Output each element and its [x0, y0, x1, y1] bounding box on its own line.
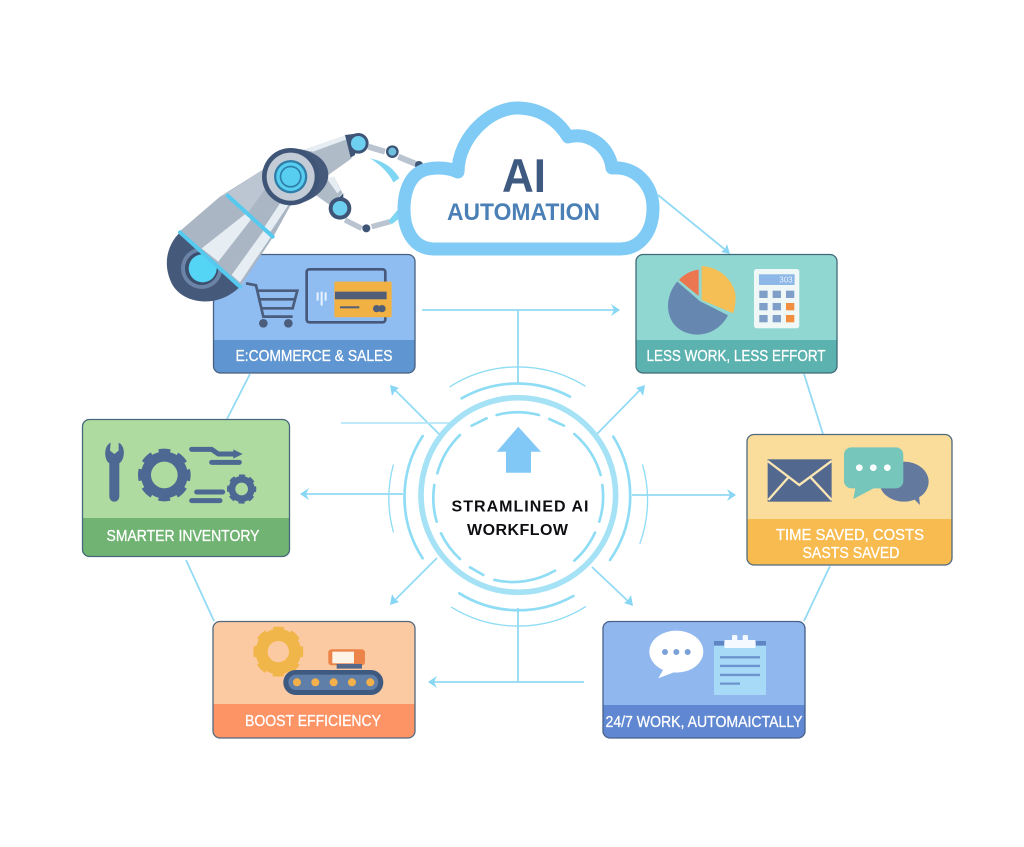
central hub: streamlined AI workflow — [389, 367, 648, 626]
icon: wrench and gears — [105, 443, 255, 502]
robot lower arm and base — [167, 168, 292, 301]
icon: gear and conveyor — [256, 629, 383, 695]
icon: speech bubble — [649, 631, 703, 678]
robot upper arm and fingers — [262, 133, 423, 232]
connector lines and arrows — [186, 195, 830, 688]
icon: chat bubbles — [844, 447, 929, 505]
label: boost efficiency: BOOST EFFICIENCY — [245, 713, 381, 730]
panel: boost efficiency — [213, 622, 415, 738]
cloud subtitle: automation: AUTOMATION — [447, 199, 600, 226]
icon: shopping cart — [246, 283, 297, 328]
icon: robot arm — [167, 133, 423, 301]
panel: 24/7 work — [603, 622, 805, 738]
panel: smarter inventory — [82, 420, 290, 556]
panel: less work — [636, 254, 837, 373]
label: 24/7 work: 24/7 WORK, AUTOMAICTALLY — [606, 714, 803, 731]
icon: up arrow — [497, 427, 541, 473]
icon: envelope — [768, 459, 832, 502]
icon: calculator — [754, 269, 799, 328]
icon: notepad — [714, 635, 766, 695]
panel: e-commerce and sales — [214, 254, 415, 373]
panel: time saved — [747, 434, 952, 565]
cloud: AI automation — [404, 108, 653, 249]
label: e-commerce: E:COMMERCE & SALES — [236, 348, 392, 365]
cloud title: AI: AI — [502, 149, 546, 202]
label: smarter inventory: SMARTER INVENTORY — [106, 528, 260, 545]
hub rings — [389, 367, 648, 626]
hub title: STRAMLINED AI — [452, 498, 588, 516]
icon: pie chart — [668, 266, 736, 335]
label: less work: LESS WORK, LESS EFFORT — [646, 348, 826, 365]
panel: time saved: SASTS SAVED — [802, 545, 900, 562]
icon: calculator: 303 — [779, 276, 793, 285]
hub title: WORKFLOW — [467, 522, 569, 539]
hub title — [452, 498, 588, 539]
icon: tablet and credit card — [307, 269, 392, 322]
label: time saved: TIME SAVED, COSTS — [776, 527, 924, 544]
